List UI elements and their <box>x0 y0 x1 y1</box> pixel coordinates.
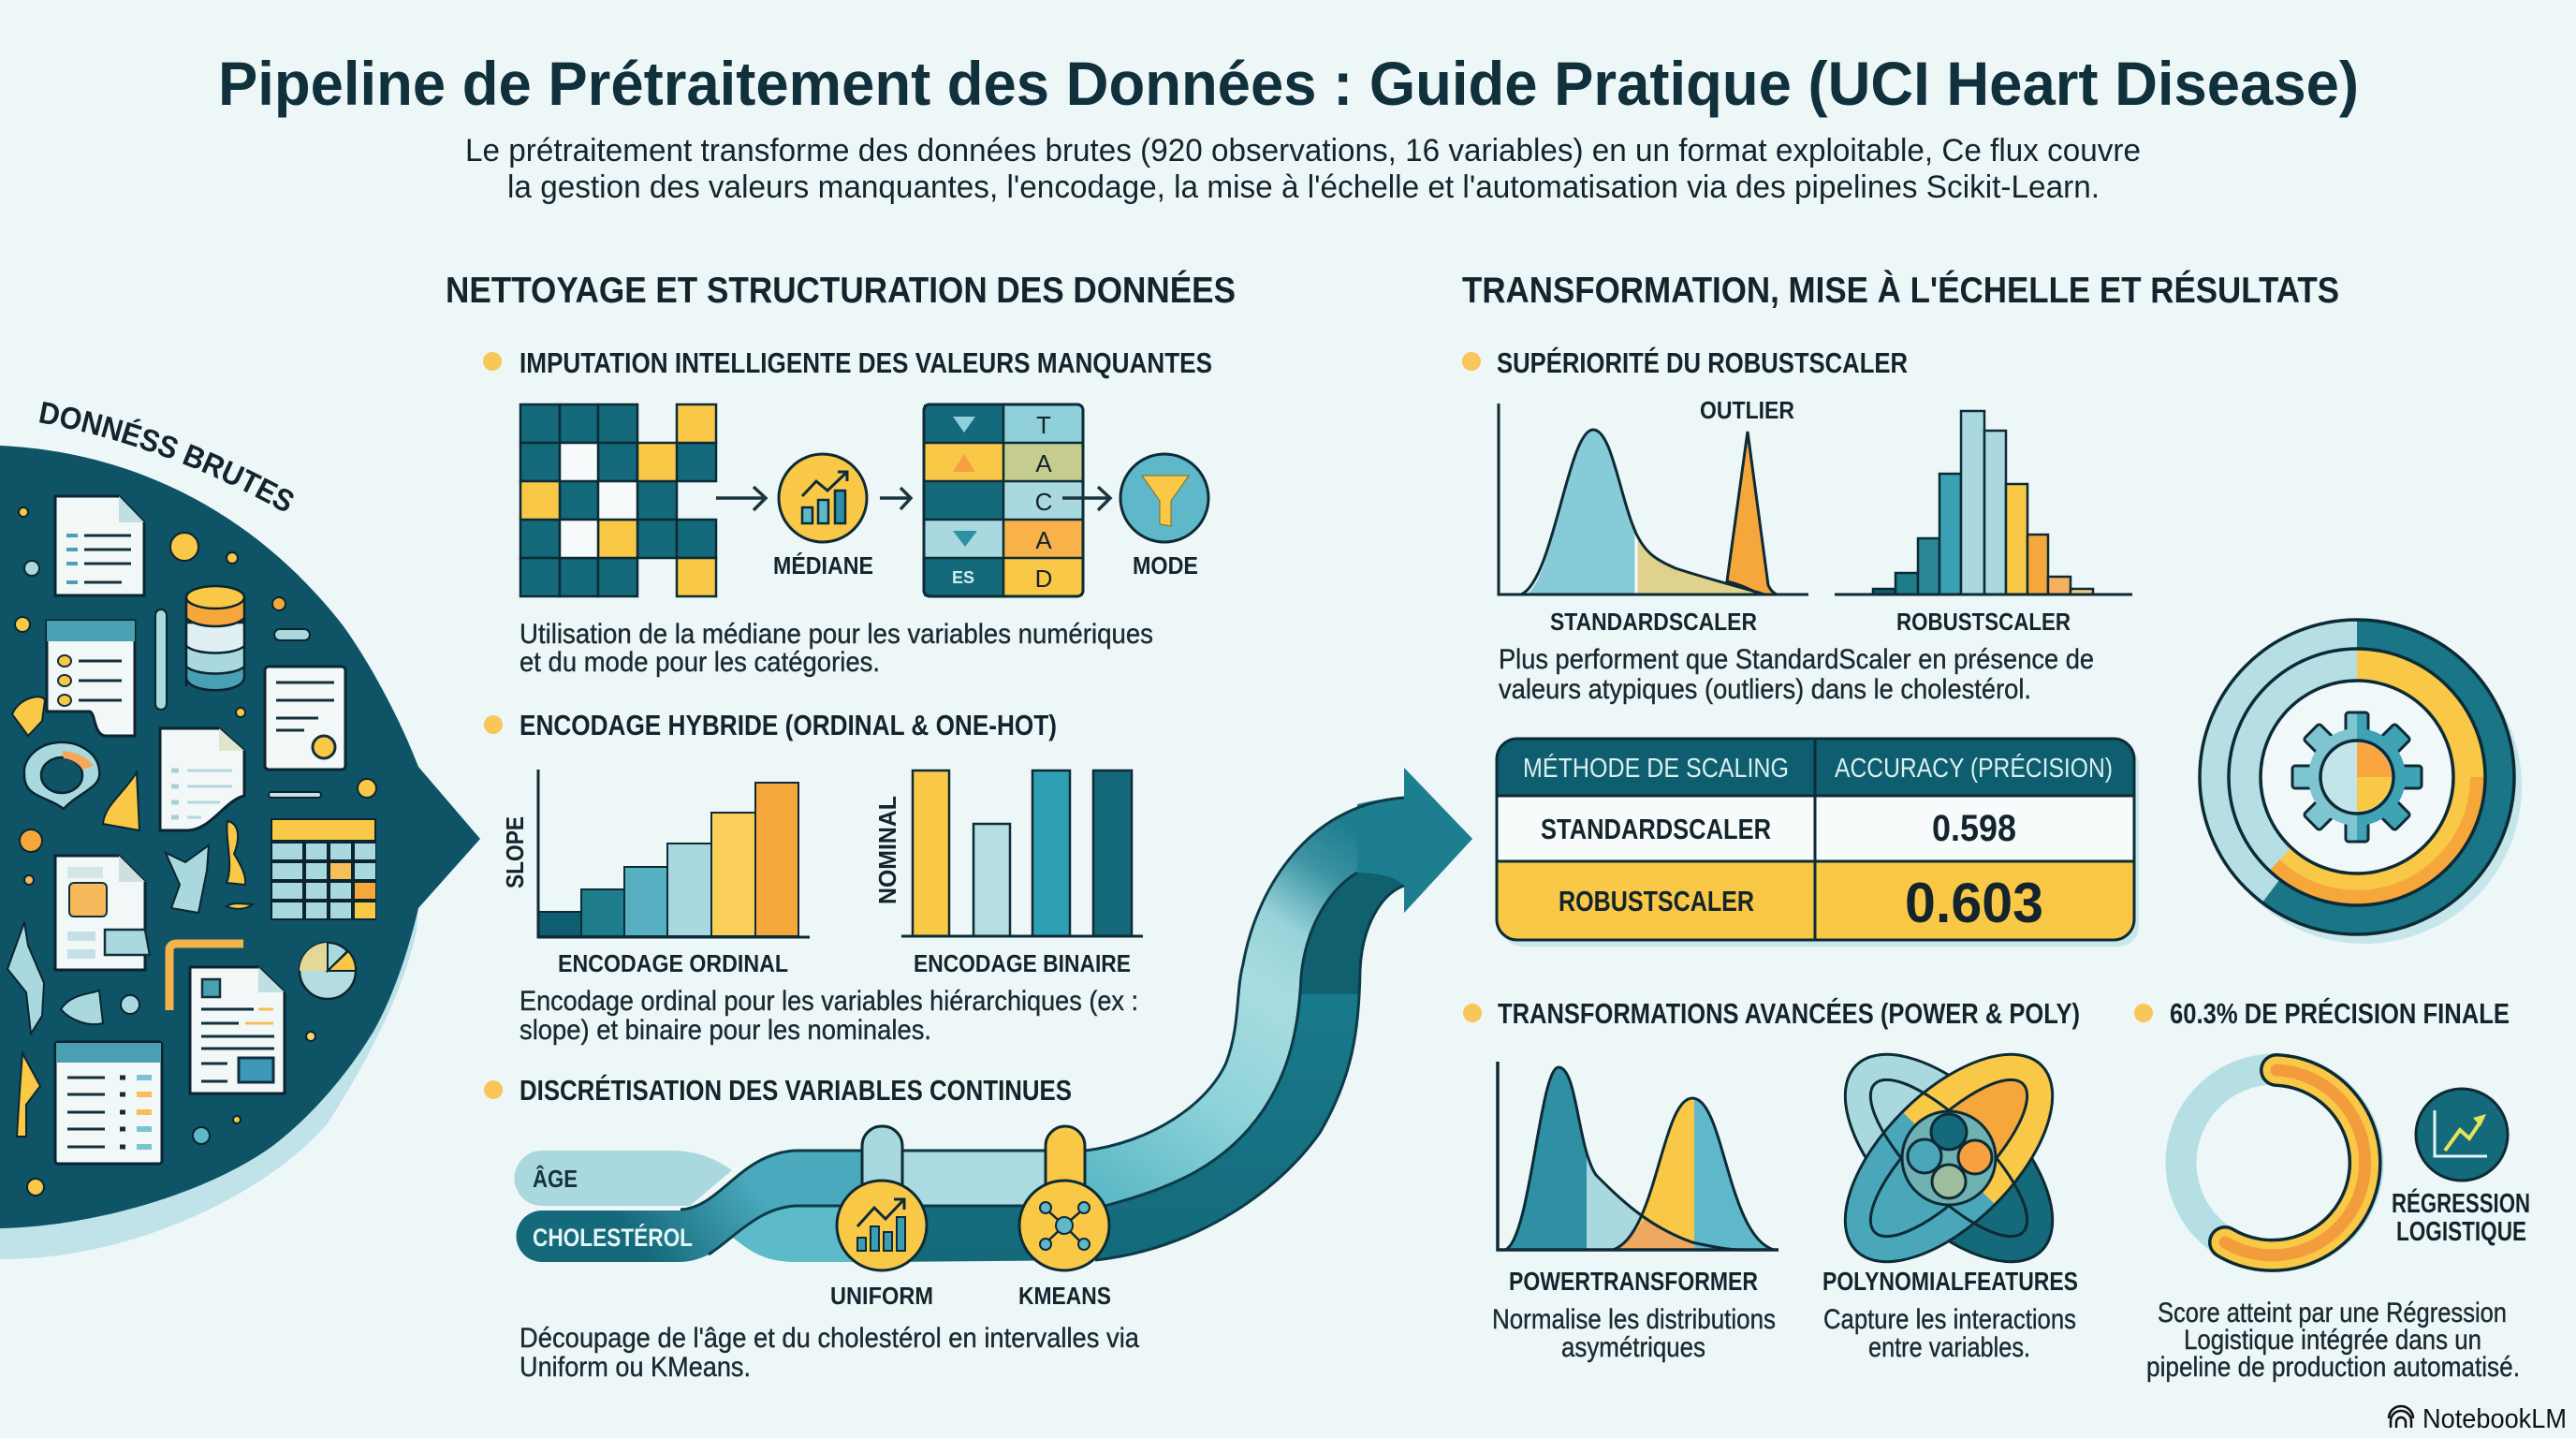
comparison table <box>1497 739 2139 946</box>
label: polynomialfeatures: POLYNOMIALFEATURES <box>1822 1267 2078 1296</box>
label: médiane: MÉDIANE <box>773 551 873 580</box>
description: Logistique intégrée dans un <box>2184 1325 2481 1356</box>
section heading: transformation: TRANSFORMATION, MISE À L'ÉCHELLE ET RÉSULTATS <box>1462 270 2339 311</box>
matrix with missing values <box>520 404 716 596</box>
chart: ordinal: SLOPE <box>501 816 529 888</box>
panel: encodage <box>484 709 1143 1046</box>
imputed table <box>924 404 1083 596</box>
icon: mode funnel <box>1120 454 1208 542</box>
curved label: données brutes: DONNÉSS BRUTES <box>39 402 294 511</box>
label: standardscaler: STANDARDSCALER <box>1550 608 1757 636</box>
label: robustscaler: ROBUSTSCALER <box>1896 608 2071 636</box>
title: Pipeline de Prétraitement des Données : Guide Pratique (UCI Heart Disease) <box>218 49 2359 118</box>
description: valeurs atypiques (outliers) dans le cholestérol. <box>1499 674 2031 705</box>
label: uniform: UNIFORM <box>830 1282 933 1310</box>
bullet <box>1463 1004 1482 1022</box>
document 4 <box>160 728 244 830</box>
data blob <box>0 446 480 1228</box>
light shapes <box>7 845 209 1034</box>
document 1 <box>55 496 144 595</box>
description <box>1499 644 2094 705</box>
document 3 <box>265 667 345 770</box>
document 5 <box>55 856 150 970</box>
description: power: asymétriques <box>1561 1332 1705 1363</box>
description: Utilisation de la médiane pour les variables numériques <box>520 619 1153 650</box>
label: régression logistique: RÉGRESSION <box>2392 1187 2530 1219</box>
bullet <box>484 715 503 734</box>
chart: powertransformer <box>1498 1062 1778 1250</box>
heading: imputation: IMPUTATION INTELLIGENTE DES VALEURS MANQUANTES <box>520 346 1212 379</box>
panel: discrétisation <box>484 768 1472 1383</box>
description: Score atteint par une Régression <box>2158 1298 2507 1328</box>
label: outlier: OUTLIER <box>1700 396 1794 424</box>
logo: notebooklm: NotebookLM <box>2422 1404 2567 1434</box>
icon: médiane <box>779 454 867 542</box>
value: 0.603: 0.603 <box>1905 872 2043 934</box>
header: méthode: MÉTHODE DE SCALING <box>1523 753 1789 784</box>
arrow <box>716 487 766 510</box>
bullet <box>2134 1004 2153 1022</box>
description: Uniform ou KMeans. <box>520 1352 751 1383</box>
row: standardscaler: STANDARDSCALER <box>1541 813 1771 845</box>
orange bracket <box>169 944 243 1010</box>
panel: imputation <box>483 346 1212 678</box>
description: power <box>1492 1304 1776 1363</box>
heading: discrétisation: DISCRÉTISATION DES VARIABLES CONTINUES <box>520 1074 1072 1107</box>
subtitle: la gestion des valeurs manquantes, l'encodage, la mise à l'échelle et l'automatisation via des pipelines Scikit-Learn. <box>507 169 2100 205</box>
label: encodage ordinal: ENCODAGE ORDINAL <box>558 949 788 977</box>
value: 0.598: 0.598 <box>1932 808 2016 849</box>
panel: précision finale <box>2134 997 2530 1383</box>
description <box>520 1323 1139 1383</box>
label: mode: MODE <box>1133 551 1198 580</box>
icon: kmeans <box>1019 1181 1109 1270</box>
panel: transformations avancées <box>1463 997 2087 1363</box>
peg: uniform <box>862 1126 902 1211</box>
chart: robustscaler histogram <box>1835 411 2132 594</box>
row: robustscaler: ROBUSTSCALER <box>1559 885 1754 917</box>
description: Plus performent que StandardScaler en présence de <box>1499 644 2094 675</box>
imputed table: ES <box>952 568 974 587</box>
heading: robustscaler: SUPÉRIORITÉ DU ROBUSTSCALER <box>1497 346 1908 379</box>
panel: données brutes <box>0 402 480 1259</box>
peg: kmeans <box>1046 1126 1085 1211</box>
heading: précision: 60.3% DE PRÉCISION FINALE <box>2170 997 2510 1030</box>
arrow <box>880 488 911 509</box>
chart: ordinal <box>501 770 810 937</box>
icon: polynomial features <box>1810 1020 2087 1297</box>
imputed table: T <box>1036 411 1051 439</box>
bullet <box>483 352 502 371</box>
small dots <box>15 507 376 1196</box>
icon: donut shape <box>24 742 99 809</box>
description: power: Normalise les distributions <box>1492 1304 1776 1335</box>
yellow shapes <box>12 697 253 1137</box>
bullet <box>1462 352 1481 371</box>
icon: database <box>186 586 244 690</box>
description <box>2146 1298 2520 1383</box>
description: pipeline de production automatisé. <box>2146 1352 2520 1383</box>
label: kmeans: KMEANS <box>1018 1282 1111 1310</box>
icon: logistic regression <box>2416 1089 2508 1181</box>
heading: transformations: TRANSFORMATIONS AVANCÉES (POWER & POLY) <box>1498 997 2080 1030</box>
imputed table: D <box>1035 565 1052 593</box>
icon: uniform <box>837 1181 927 1270</box>
arrow <box>1062 487 1110 510</box>
document 6 <box>190 967 285 1093</box>
header: accuracy: ACCURACY (PRÉCISION) <box>1835 753 2113 784</box>
description <box>520 986 1138 1046</box>
document 7 table <box>55 1042 162 1164</box>
description: poly <box>1823 1304 2076 1363</box>
description: Découpage de l'âge et du cholestérol en intervalles via <box>520 1323 1139 1354</box>
heading: encodage: ENCODAGE HYBRIDE (ORDINAL & ONE-HOT) <box>520 709 1057 741</box>
chart: progress ring <box>2181 1069 2368 1256</box>
imputed table: A <box>1035 449 1052 477</box>
description: slope) et binaire pour les nominales. <box>520 1015 931 1046</box>
label: encodage binaire: ENCODAGE BINAIRE <box>914 949 1131 977</box>
description: Encodage ordinal pour les variables hiérarchiques (ex : <box>520 986 1138 1017</box>
description <box>520 619 1153 678</box>
panel: robustscaler <box>1462 346 2132 705</box>
description: poly: Capture les interactions <box>1823 1304 2076 1335</box>
label: régression logistique <box>2392 1187 2530 1247</box>
section heading: nettoyage: NETTOYAGE ET STRUCTURATION DES DONNÉES <box>446 270 1236 311</box>
big flow arrow <box>515 768 1472 1262</box>
description: et du mode pour les catégories. <box>520 647 880 678</box>
label: powertransformer: POWERTRANSFORMER <box>1509 1267 1758 1296</box>
description: poly: entre variables. <box>1868 1332 2030 1363</box>
chart: nominal <box>873 770 1143 936</box>
imputed table: C <box>1035 488 1052 516</box>
subtitle <box>465 133 2141 205</box>
bullet <box>484 1080 503 1099</box>
subtitle: Le prétraitement transforme des données brutes (920 observations, 16 variables) en un format exploitable, Ce flux couvre <box>465 133 2141 169</box>
table icon <box>271 818 376 920</box>
label: régression logistique: LOGISTIQUE <box>2396 1217 2526 1247</box>
chart: nominal: NOMINAL <box>873 796 901 904</box>
document 2 list <box>47 621 135 736</box>
icon: gear donut <box>2200 620 2522 944</box>
pie icon <box>300 943 356 999</box>
chart: standardscaler distribution <box>1499 404 1808 594</box>
label: âge: ÂGE <box>533 1165 578 1193</box>
imputed table: A <box>1035 526 1052 554</box>
blob shadow <box>0 908 418 1259</box>
label: cholestérol: CHOLESTÉROL <box>533 1223 693 1252</box>
